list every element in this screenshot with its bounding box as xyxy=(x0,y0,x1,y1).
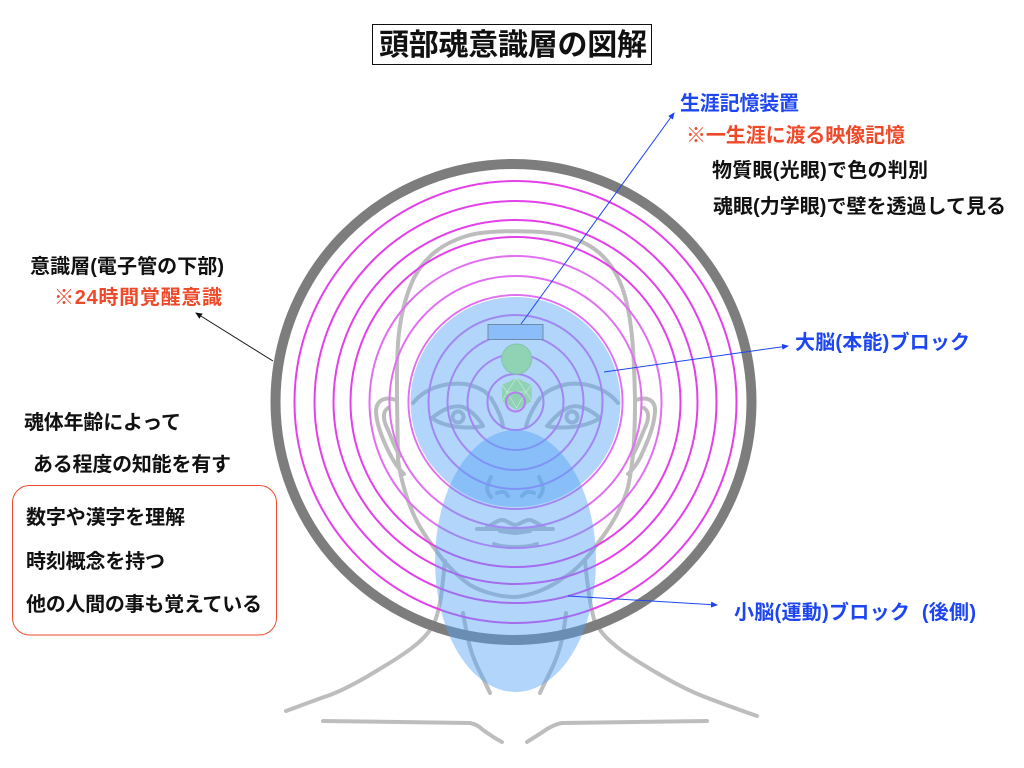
shoulders xyxy=(286,630,757,716)
right ear xyxy=(628,398,655,474)
collar bones xyxy=(323,721,707,742)
head outline xyxy=(397,231,635,597)
green polyhedron xyxy=(502,378,532,412)
arrow: to lifetime memory label xyxy=(521,113,674,324)
heading: 意識層(電子管の下部) xyxy=(30,255,224,278)
ability: time: 時刻概念を持つ xyxy=(26,550,165,573)
physical eye: 物質眼(光眼)で色の判別 xyxy=(712,159,928,182)
cerebellum block xyxy=(435,430,596,692)
arrow: to cerebellum label xyxy=(568,596,717,605)
panel: abilities xyxy=(12,486,276,635)
label: cerebellum block: 小脳(運動)ブロック (後側) xyxy=(734,600,976,624)
label: lifetime memory device xyxy=(680,92,1006,218)
text block: intelligence by soul age: ある程度の知能を有す xyxy=(33,453,231,476)
nose xyxy=(487,477,543,497)
arrow: to consciousness layer label xyxy=(196,313,273,361)
arrow: to cerebrum label xyxy=(604,346,788,372)
text block: intelligence by soul age xyxy=(24,411,231,476)
right eye xyxy=(547,406,600,427)
mouth and chin xyxy=(477,520,553,547)
label: consciousness layer xyxy=(30,255,224,309)
ability: characters: 数字や漢字を理解 xyxy=(26,506,185,529)
green sphere xyxy=(502,344,532,374)
title: 頭部魂意識層の図解 xyxy=(379,29,647,62)
heading: 生涯記憶装置 xyxy=(680,92,799,115)
concentric soul rings xyxy=(294,181,736,623)
text block: intelligence by soul age: 魂体年齢によって xyxy=(24,411,181,434)
outer gray ring: consciousness layer xyxy=(276,164,752,640)
label: cerebrum block: 大脳(本能)ブロック xyxy=(795,330,970,354)
left eye xyxy=(432,406,483,427)
note: ※一生涯に渡る映像記憶 xyxy=(686,124,905,147)
eyebrows and nose bridge xyxy=(413,384,618,427)
inner rings xyxy=(370,256,662,548)
note: ※24時間覚醒意識 xyxy=(54,286,222,309)
outer rings xyxy=(294,181,736,623)
neck xyxy=(435,561,595,693)
soul eye: 魂眼(力学眼)で壁を透過して見る xyxy=(713,195,1006,218)
lifetime memory device xyxy=(488,324,543,340)
head and body line drawing xyxy=(286,231,757,742)
ability: people: 他の人間の事も覚えている xyxy=(26,593,262,616)
cerebrum block xyxy=(410,296,621,508)
left ear xyxy=(376,398,404,474)
